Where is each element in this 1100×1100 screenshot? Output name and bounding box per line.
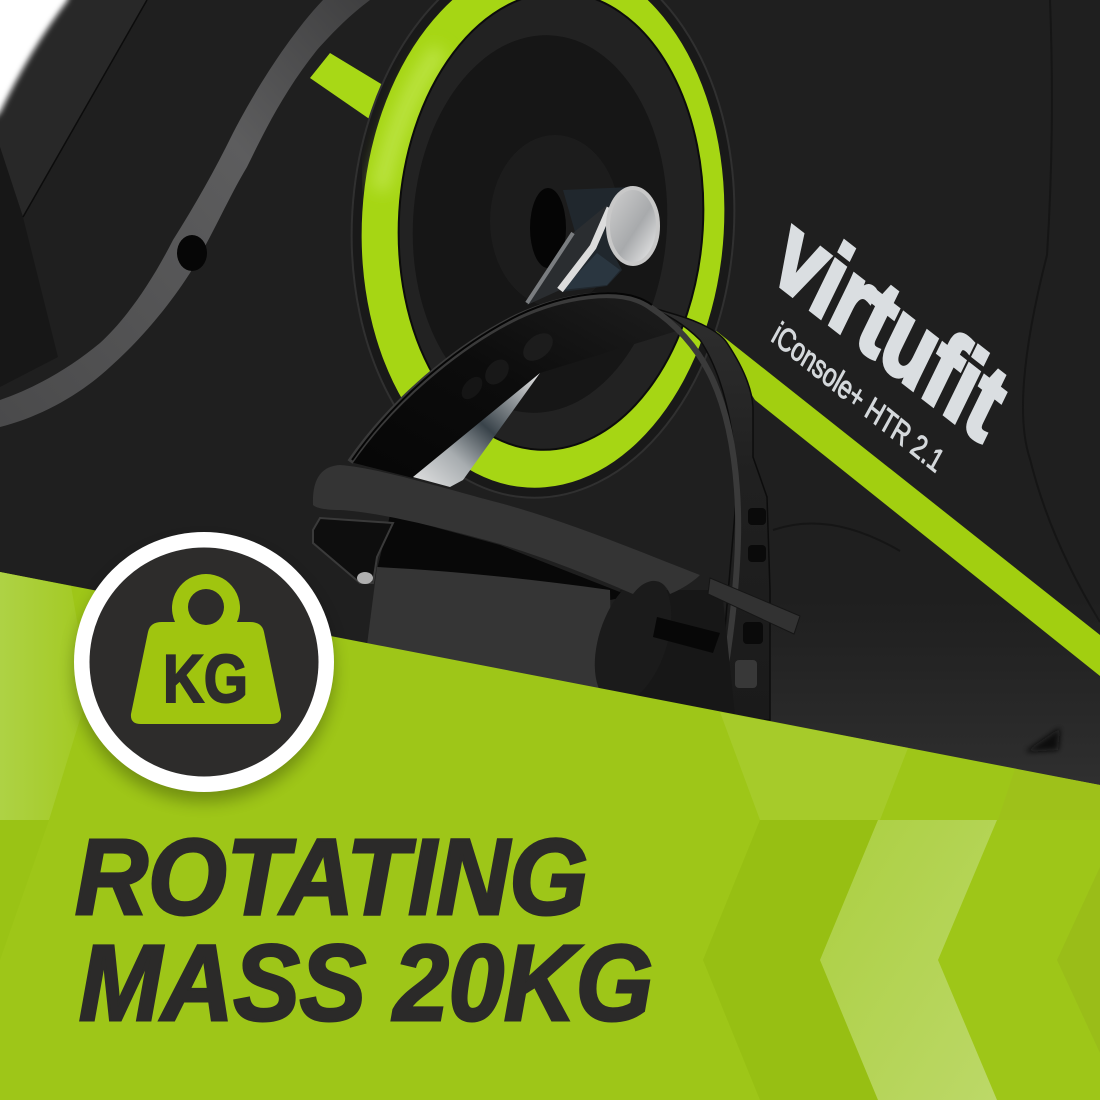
title: MASS 20KG — [79, 922, 653, 1043]
flywheel outer halo — [336, 0, 750, 509]
flywheel green ring — [347, 0, 739, 498]
green diagonal stripe lower — [705, 322, 1100, 676]
pedal rim — [313, 465, 700, 594]
lower body shading — [770, 600, 1100, 800]
chevron far right — [1057, 867, 1100, 1053]
right shell seams — [773, 0, 1100, 622]
green banner — [0, 572, 1100, 1100]
chevron dark — [703, 820, 878, 1100]
pedal underside — [600, 590, 735, 715]
model label: iConsole+ HTR 2.1 — [767, 315, 950, 480]
small shadow mark — [1025, 728, 1060, 752]
pedal left end — [313, 518, 393, 584]
pedal strap — [350, 293, 770, 720]
pedal under black gap — [653, 617, 720, 653]
title — [75, 816, 653, 1043]
flywheel inner disc — [386, 0, 716, 459]
hub hole — [530, 188, 566, 268]
icon badge: kettlebell weight — [74, 532, 334, 792]
chevron light — [820, 820, 997, 1100]
pedal cylinder — [367, 567, 612, 705]
green diagonal stripe upper — [310, 53, 396, 127]
banner light upper band — [720, 712, 908, 820]
white page corner — [0, 0, 72, 130]
pedal cage shadow — [377, 515, 630, 600]
hub — [490, 135, 620, 307]
banner dark left wedge — [0, 820, 49, 960]
grey curved frame strip — [0, 0, 370, 427]
pedal cylinder end — [580, 567, 686, 713]
weight shape — [131, 574, 281, 724]
badge shadow — [74, 542, 334, 802]
crank arm — [527, 187, 632, 305]
banner upper right band — [998, 769, 1100, 820]
banner light left panel — [0, 572, 89, 820]
crank blade — [413, 373, 540, 487]
brand logo: virtufit: virtufit — [758, 191, 1024, 463]
flywheel center plate — [402, 28, 678, 420]
crank cap — [608, 188, 658, 264]
title: ROTATING — [75, 816, 588, 937]
left shell panel — [0, 0, 147, 387]
ring highlight — [380, 50, 440, 190]
weight label: KG — [163, 641, 248, 717]
frame hole — [177, 235, 207, 271]
photo: exercise bike close-up — [0, 0, 1100, 800]
pedal tab — [708, 578, 800, 634]
